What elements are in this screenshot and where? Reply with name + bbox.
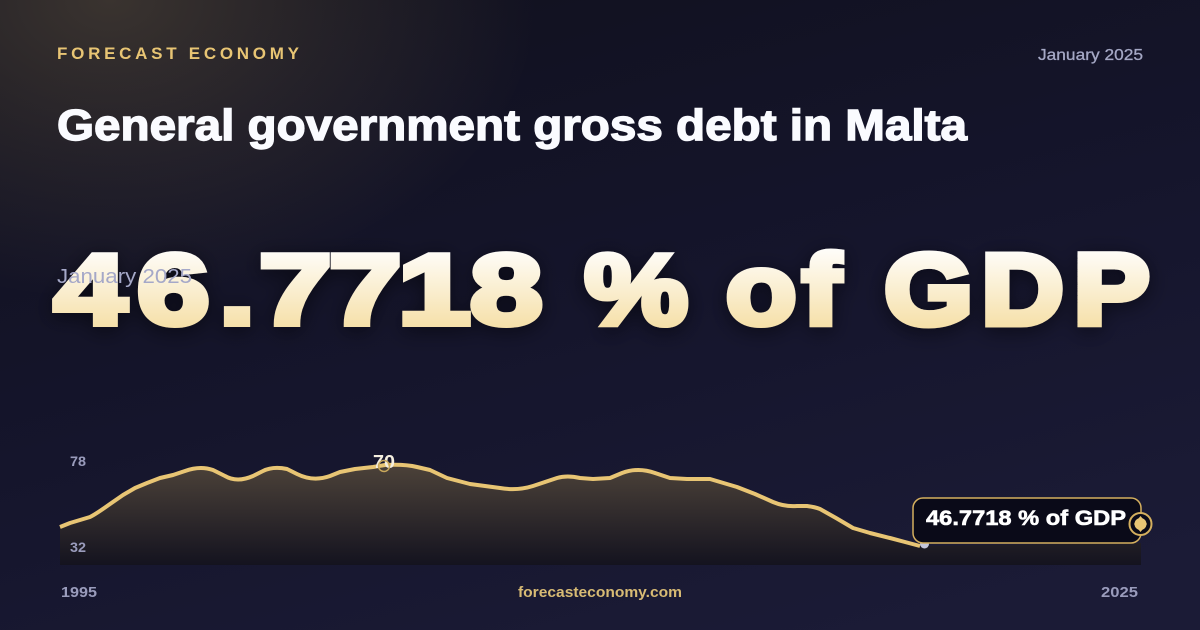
- end marker: [1130, 513, 1152, 535]
- area under line: [60, 465, 1141, 565]
- date top right: January 2025: [1038, 47, 1143, 64]
- date overlapping value: January 2025: [57, 266, 192, 288]
- big value: [54, 233, 1150, 346]
- chart: [60, 452, 1152, 565]
- peak value label: 70: [373, 452, 395, 472]
- x axis start year: 1995: [61, 584, 97, 601]
- axis label min: 32: [70, 539, 86, 555]
- title: General government gross debt in Malta: [57, 101, 968, 150]
- axis label max: 78: [70, 453, 86, 469]
- value callout: [913, 498, 1141, 543]
- big value: GDP: [885, 233, 1150, 346]
- big value: 46.7718: [54, 234, 543, 346]
- trend line: [60, 465, 920, 546]
- x axis end year: 2025: [1101, 584, 1138, 601]
- big value: % of: [584, 234, 842, 345]
- peak marker: [378, 460, 390, 472]
- value callout: 46.7718 % of GDP: [926, 507, 1126, 530]
- brand label: FORECAST ECONOMY: [57, 44, 300, 63]
- low point marker: [920, 540, 929, 548]
- source: forecasteconomy.com: [518, 584, 682, 601]
